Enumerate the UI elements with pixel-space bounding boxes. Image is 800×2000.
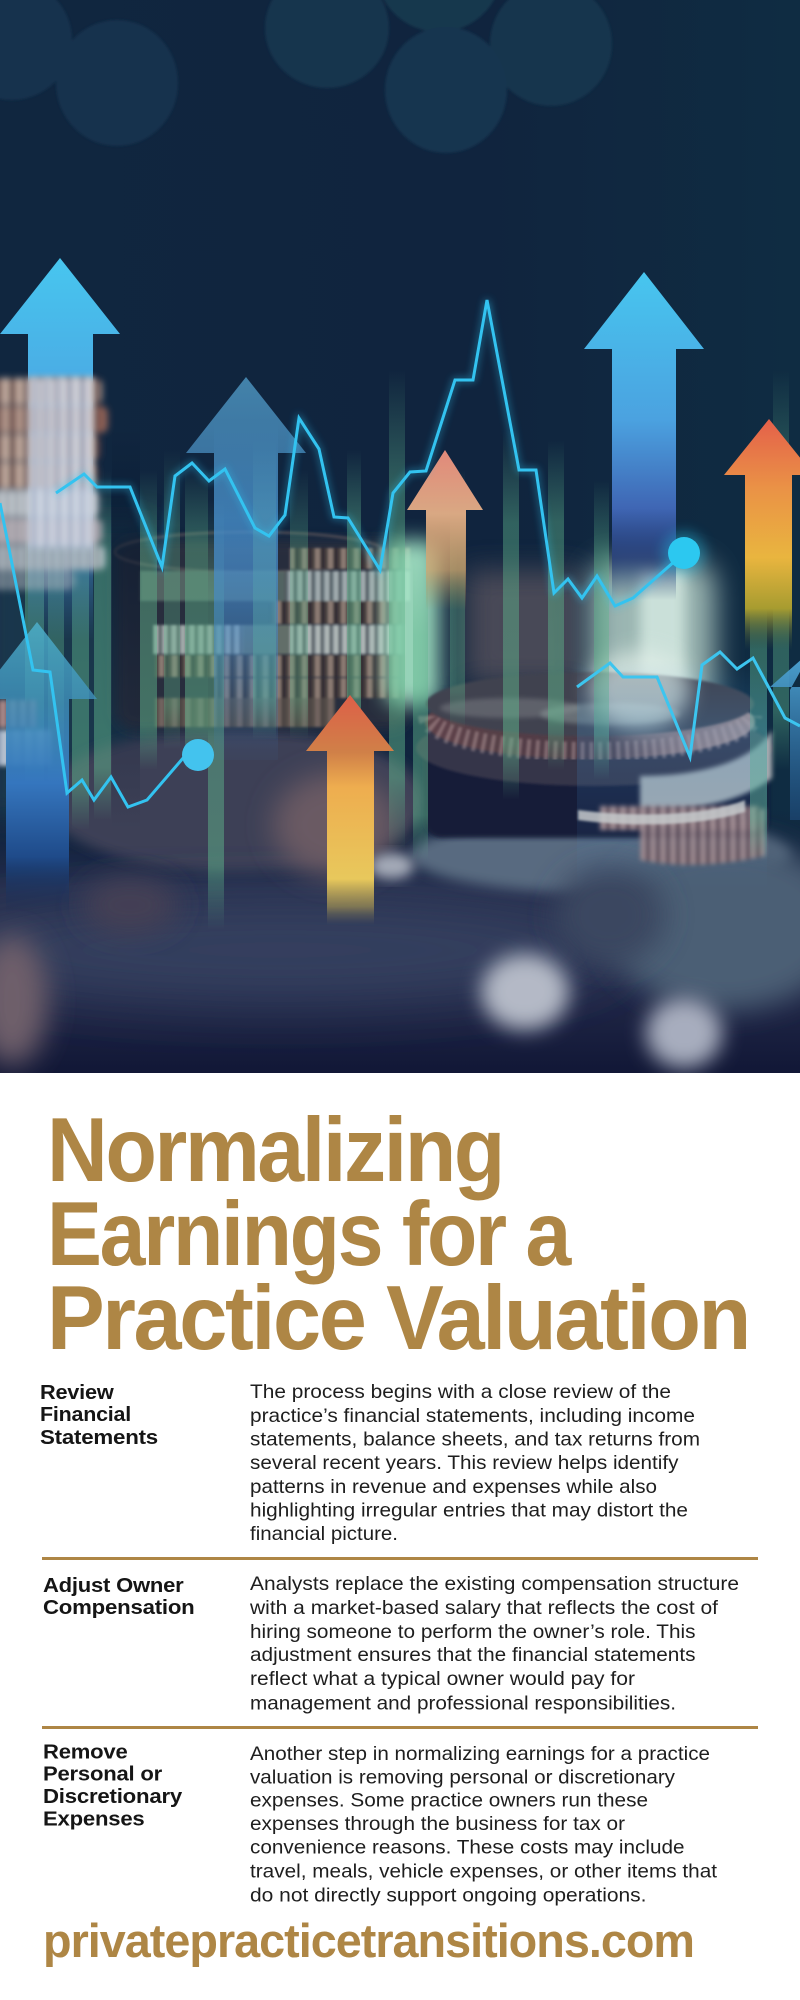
trend line: left: [0, 503, 184, 807]
arrow: pink: [407, 450, 483, 610]
section 1 heading: Financial: [40, 1404, 131, 1426]
vertical chart bars: [25, 370, 789, 930]
title: Normalizing: [47, 1100, 503, 1201]
section 2 heading: Adjust Owner: [43, 1575, 184, 1597]
coin stack: centre: [115, 532, 440, 730]
section 1 body: highlighting irregular entries that may distort the: [250, 1500, 688, 1522]
section 3 heading: Expenses: [43, 1808, 145, 1830]
section 3 body: Another step in normalizing earnings for a practice: [250, 1743, 710, 1765]
coin stack: top left, bright over arrow: [0, 378, 108, 766]
section 1 heading: Statements: [40, 1427, 158, 1449]
section 2 body: hiring someone to perform the owner’s role. This: [250, 1621, 696, 1643]
section 3 body: valuation is removing personal or discretionary: [250, 1766, 675, 1788]
section 1 body: several recent years. This review helps identify: [250, 1452, 679, 1474]
hero photo: coins with rising arrows: [0, 0, 800, 1073]
arrow: top left blue: [0, 258, 120, 640]
coin stack: right, sharp: [416, 650, 772, 865]
section 1 heading: Review: [40, 1382, 114, 1404]
section 3 body: [250, 1743, 718, 1906]
section 3 body: expenses through the business for tax or: [250, 1813, 626, 1835]
section 2 body: management and professional responsibilities.: [250, 1692, 676, 1714]
teal haze behind lower bars: [0, 520, 134, 817]
footer website: privatepracticetransitions.com: [43, 1914, 694, 1967]
section 2 body: [249, 1573, 739, 1714]
section 1 heading: [40, 1382, 158, 1449]
section 1 body: practice’s financial statements, including income: [250, 1405, 695, 1427]
data point: upper right: [662, 531, 706, 575]
title: Earnings for a: [47, 1184, 573, 1285]
section 2 body: Analysts replace the existing compensation structure: [250, 1573, 739, 1595]
section 3 body: expenses. Some practice owners run these: [250, 1790, 648, 1812]
section 3: remove personal or discretionary expenses: [43, 1742, 718, 1906]
section 3 body: travel, meals, vehicle expenses, or other items that: [250, 1860, 718, 1882]
section 1 body: statements, balance sheets, and tax returns from: [250, 1428, 700, 1450]
title: [47, 1100, 749, 1369]
section 2 heading: Compensation: [43, 1597, 194, 1619]
title: Practice Valuation: [47, 1268, 749, 1369]
bokeh circles: [0, 0, 612, 153]
section 2 body: adjustment ensures that the financial statements: [250, 1644, 696, 1666]
arrow: lower orange yellow: [306, 695, 394, 925]
section 3 heading: Remove: [43, 1742, 128, 1764]
coin stack: right, blurred: [465, 560, 715, 720]
arrow: right edge blue: [770, 650, 800, 820]
arrow: top right blue: [584, 272, 704, 600]
section 1 body: financial picture.: [250, 1523, 398, 1545]
section 2: adjust owner compensation: [43, 1573, 739, 1714]
section 1 body: patterns in revenue and expenses while also: [250, 1476, 657, 1498]
section 3 heading: [43, 1742, 183, 1830]
trend line: centre with glow: [56, 300, 684, 606]
section 3 body: do not directly support ongoing operations.: [250, 1884, 646, 1906]
arrow: centre translucent blue: [186, 377, 306, 760]
section 2 heading: [43, 1575, 194, 1619]
arrow: right orange: [724, 419, 800, 650]
lower blurred coins: [0, 728, 800, 1073]
section 3 body: convenience reasons. These costs may include: [250, 1836, 684, 1858]
arrow: lower left blue: [0, 622, 97, 915]
section 1 body: The process begins with a close review of the: [250, 1381, 671, 1403]
section 2 body: reflect what a typical owner would pay for: [250, 1668, 636, 1690]
section 3 heading: Personal or: [43, 1764, 162, 1786]
trend line: lower right: [577, 652, 800, 757]
data point: lower left: [182, 739, 214, 771]
section 3 heading: Discretionary: [43, 1786, 183, 1808]
section 2 body: with a market-based salary that reflects the cost of: [249, 1597, 719, 1619]
section 1 body: [250, 1381, 700, 1545]
section 1: review financial statements: [40, 1381, 700, 1545]
